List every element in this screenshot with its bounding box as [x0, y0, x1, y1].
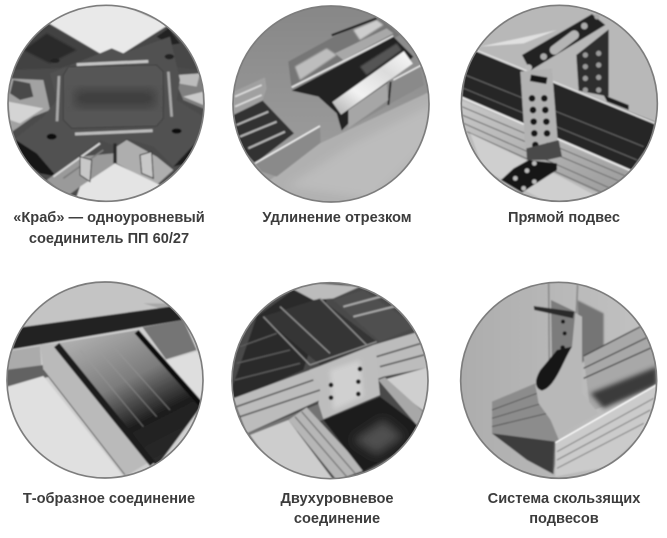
panel: direct hanger	[460, 4, 658, 225]
caption: sliding hangers: подвесов	[529, 511, 599, 527]
caption: two-level joint: соединение	[294, 511, 380, 527]
panel: T-shaped joint	[6, 281, 204, 506]
photo circle: T-shaped joint	[6, 281, 204, 479]
panel: crab connector	[7, 4, 205, 246]
caption: sliding hangers: Система скользящих	[488, 491, 641, 507]
photo circle: crab connector	[7, 4, 205, 202]
panel: two-level joint	[231, 282, 429, 526]
panel: sliding hangers	[460, 282, 658, 526]
photo circle: two-level joint	[231, 282, 429, 480]
panel: extension by offcut	[232, 5, 430, 225]
photo circle: extension by offcut	[232, 5, 430, 203]
photo circle: direct hanger	[460, 4, 658, 202]
caption: two-level joint: Двухуровневое	[280, 491, 394, 507]
caption: crab connector: «Краб» — одноуровневый	[13, 210, 205, 226]
photo circle: sliding hangers	[460, 282, 658, 480]
caption: crab connector: соединитель ПП 60/27	[29, 231, 189, 247]
caption: extension by offcut: Удлинение отрезком	[262, 210, 412, 226]
caption: direct hanger: Прямой подвес	[508, 210, 620, 226]
caption: T-shaped joint: Т-образное соединение	[23, 491, 195, 507]
